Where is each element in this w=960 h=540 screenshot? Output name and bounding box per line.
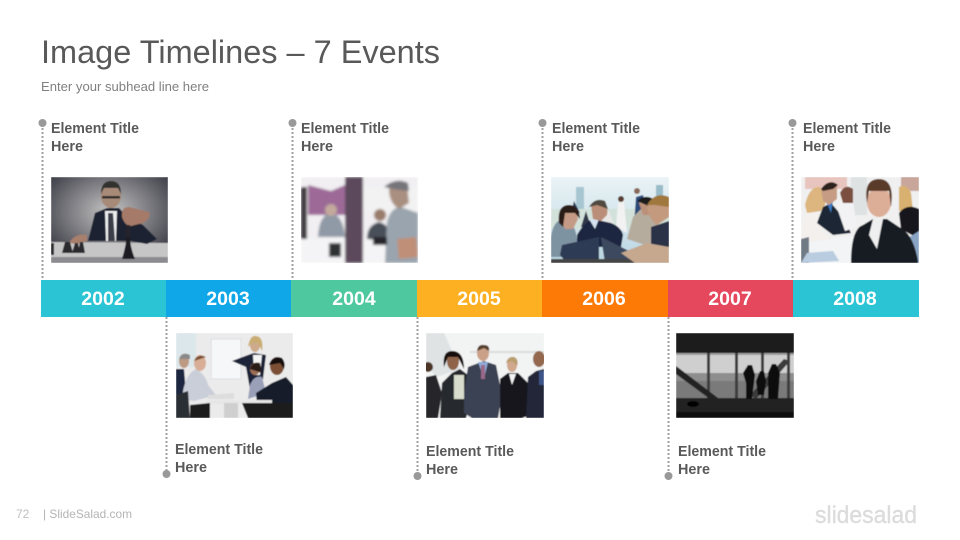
- event 2003 marker and title: Here: [175, 459, 207, 476]
- event 2004 marker and title: Here: [301, 138, 333, 155]
- event 2003 marker and title: [162, 317, 263, 478]
- segment 2005: [417, 280, 542, 317]
- segment 2003: 2003: [206, 288, 250, 310]
- photo: presentation at whiteboard: [176, 333, 293, 418]
- event 2005 marker and title: [414, 317, 514, 480]
- segment 2004: [291, 280, 417, 317]
- event 2005 marker and title: Element Title: [426, 443, 514, 460]
- photo: man playing chess: [51, 177, 168, 263]
- event 2006 marker and title: Here: [552, 138, 584, 155]
- event 2002 marker and title: [38, 119, 139, 280]
- segment 2003: [166, 280, 291, 317]
- logo: slidesalad: slidesalad: [815, 502, 917, 529]
- photo: businesswoman with team: [801, 177, 919, 263]
- event 2007 marker and title: Element Title: [678, 443, 766, 460]
- photo: silhouettes at window: [676, 333, 794, 418]
- event 2008 marker and title: [788, 119, 891, 280]
- photo: office meeting through glass: [301, 177, 418, 263]
- footer brand text: | SlideSalad.com: [43, 507, 132, 521]
- photo: team with laptops: [551, 177, 669, 263]
- event 2003 marker and title: Element Title: [175, 441, 263, 458]
- page number: 72: [16, 507, 30, 521]
- segment 2006: 2006: [582, 288, 626, 310]
- event 2007 marker and title: [664, 317, 766, 480]
- event 2006 marker and title: Element Title: [552, 120, 640, 137]
- event 2008 marker and title: Here: [803, 138, 835, 155]
- subhead: Enter your subhead line here: [41, 79, 209, 94]
- event 2006 marker and title: [538, 119, 640, 280]
- title: Image Timelines – 7 Events: [41, 34, 440, 70]
- segment 2005: 2005: [457, 288, 501, 310]
- event 2008 marker and title: Element Title: [803, 120, 891, 137]
- segment 2006: [542, 280, 668, 317]
- event 2007 marker and title: Here: [678, 461, 710, 478]
- photo: business team walking: [426, 333, 544, 418]
- segment 2007: 2007: [708, 288, 752, 310]
- segment 2002: [41, 280, 166, 317]
- segment 2002: 2002: [81, 288, 125, 310]
- event 2004 marker and title: [288, 119, 389, 280]
- segment 2008: [793, 280, 919, 317]
- timeline bar: [41, 280, 919, 317]
- segment 2004: 2004: [332, 288, 376, 310]
- segment 2008: 2008: [833, 288, 877, 310]
- event 2002 marker and title: Element Title: [51, 120, 139, 137]
- event 2005 marker and title: Here: [426, 461, 458, 478]
- event 2002 marker and title: Here: [51, 138, 83, 155]
- segment 2007: [668, 280, 793, 317]
- event 2004 marker and title: Element Title: [301, 120, 389, 137]
